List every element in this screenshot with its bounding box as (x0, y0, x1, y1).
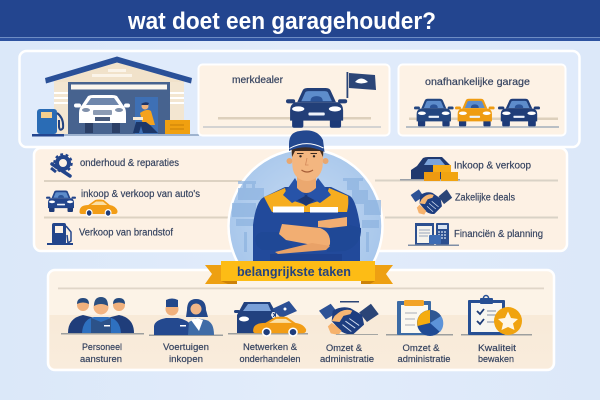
icon: dealer car (286, 88, 347, 128)
label: merkdealer: merkdealer (232, 75, 284, 86)
icon: cars with price tag: € (271, 311, 276, 320)
label: personeel aansturen: Personeel (82, 342, 122, 353)
text: inkoop & verkoop: Inkoop & verkoop (454, 160, 531, 172)
ribbon: belangrijkste taken: belangrijkste taken (237, 265, 351, 279)
label: voertuigen inkopen: Voertuigen (163, 342, 209, 353)
label: kwaliteit bewaken: Kwaliteit (478, 343, 516, 354)
icon: fuel pump (47, 223, 73, 245)
icon: dark blue car (498, 99, 540, 126)
panel: key tasks (48, 270, 554, 370)
card: onafhankelijke garage (398, 64, 566, 136)
label: personeel aansturen: aansturen (80, 354, 122, 365)
icon: orange car (80, 200, 118, 217)
mechanic portrait (227, 130, 384, 261)
icon: three staff (61, 297, 144, 334)
label: voertuigen inkopen (163, 342, 209, 365)
label: omzet & administratie: Omzet & (402, 343, 440, 354)
label: omzet & administratie (320, 343, 374, 365)
label: kwaliteit bewaken: bewaken (478, 354, 514, 365)
label: personeel aansturen (80, 342, 122, 365)
label: omzet & administratie: administratie (320, 354, 374, 365)
header band (0, 0, 600, 41)
icon: car with money (400, 157, 460, 181)
title: wat doet een garagehouder? (127, 8, 436, 35)
icon: blue car (46, 191, 76, 212)
label: netwerken & onderhandelen: Netwerken & (243, 342, 298, 353)
card: merkdealer (198, 64, 390, 136)
mechanic cap (289, 130, 324, 152)
panel: garage types (20, 51, 580, 147)
mechanic body (253, 187, 360, 261)
icon: handshake (411, 189, 452, 215)
mechanic head (286, 158, 292, 164)
icon: brand flag (346, 72, 376, 98)
label: kwaliteit bewaken (478, 343, 516, 365)
icon: handshake (319, 301, 379, 335)
label: onafhankelijke garage: onafhankelijke garage (425, 77, 530, 88)
text: verkoop van brandstof: Verkoop van brandstof (79, 228, 173, 238)
icon: blue car (414, 99, 454, 126)
label: omzet & administratie: administratie (398, 354, 450, 365)
icon: checklist with star (461, 296, 532, 336)
icon: finance documents (408, 223, 459, 246)
label: netwerken & onderhandelen (240, 342, 300, 365)
icon: gear and wrench (51, 154, 72, 176)
ribbon: belangrijkste taken (205, 261, 393, 284)
text: zakelijke deals: Zakelijke deals (455, 192, 515, 204)
mechanic crossed arms (255, 232, 295, 250)
panel: duties (34, 148, 567, 251)
text: inkoop & verkoop: inkoop & verkoop van auto's (81, 189, 200, 200)
label: voertuigen inkopen: inkopen (169, 354, 203, 365)
icon: two buyers (149, 298, 223, 336)
icon: orange car (455, 99, 495, 126)
text: financien & planning: Financiën & planning (454, 229, 543, 240)
text: onderhoud & reparaties: onderhoud & reparaties (80, 158, 179, 169)
label: netwerken & onderhandelen: onderhandelen (240, 354, 300, 365)
icon: clipboard with pie chart (386, 300, 453, 336)
illustration: garage with car, mechanic and fuel pump (32, 56, 199, 136)
icon: cars with price tag (228, 301, 308, 337)
label: omzet & administratie (398, 343, 450, 365)
label: omzet & administratie: Omzet & (326, 343, 363, 354)
